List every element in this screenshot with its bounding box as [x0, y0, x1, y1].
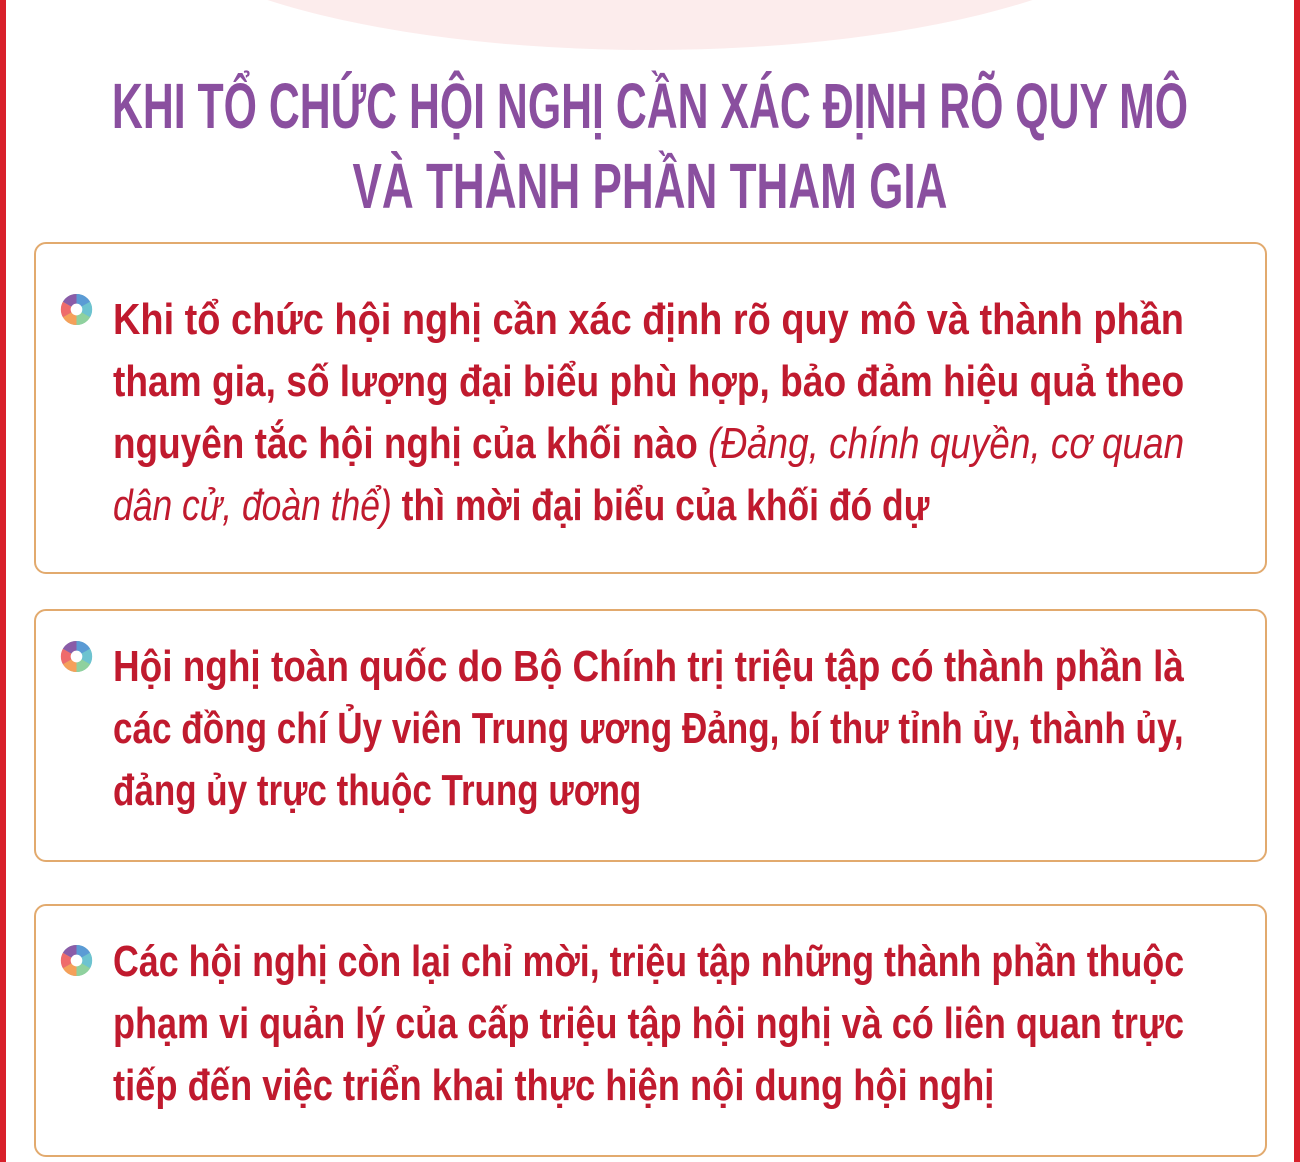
- text block 1: dân cử, đoàn thể) thì mời đại biểu của khối đó dự: [113, 481, 929, 530]
- text block 3: phạm vi quản lý của cấp triệu tập hội nghị và có liên quan trực: [113, 999, 1184, 1048]
- text block 3: Các hội nghị còn lại chỉ mời, triệu tập những thành phần thuộc: [113, 937, 1184, 986]
- panel: box 3: [34, 904, 1267, 1157]
- icon: aperture 1: [60, 294, 92, 325]
- panel: box 2: [34, 609, 1267, 862]
- panel: box 1: [34, 242, 1267, 574]
- text block 2: các đồng chí Ủy viên Trung ương Đảng, bí thư tỉnh ủy, thành ủy,: [113, 704, 1184, 753]
- icon: aperture 3: [60, 945, 92, 976]
- text block 3: [113, 937, 1184, 1110]
- left red border: [0, 0, 6, 1162]
- right red border: [1294, 0, 1300, 1162]
- icon: aperture 2: [60, 641, 92, 672]
- text block 1: Khi tổ chức hội nghị cần xác định rõ quy mô và thành phần: [113, 295, 1184, 344]
- text block 1: [113, 295, 1184, 530]
- text block 2: [113, 642, 1184, 815]
- text block 1: tham gia, số lượng đại biểu phù hợp, bảo đảm hiệu quả theo: [113, 357, 1184, 406]
- text block 1: nguyên tắc hội nghị của khối nào (Đảng, chính quyền, cơ quan: [113, 419, 1184, 468]
- pink arc background: [130, 0, 1170, 50]
- title: VÀ THÀNH PHẦN THAM GIA: [353, 150, 947, 222]
- text block 3: tiếp đến việc triển khai thực hiện nội dung hội nghị: [113, 1061, 994, 1110]
- text block 2: Hội nghị toàn quốc do Bộ Chính trị triệu tập có thành phần là: [113, 642, 1184, 691]
- text block 2: đảng ủy trực thuộc Trung ương: [113, 766, 641, 815]
- title: KHI TỔ CHỨC HỘI NGHỊ CẦN XÁC ĐỊNH RÕ QUY MÔ: [112, 70, 1188, 142]
- title: [112, 70, 1188, 222]
